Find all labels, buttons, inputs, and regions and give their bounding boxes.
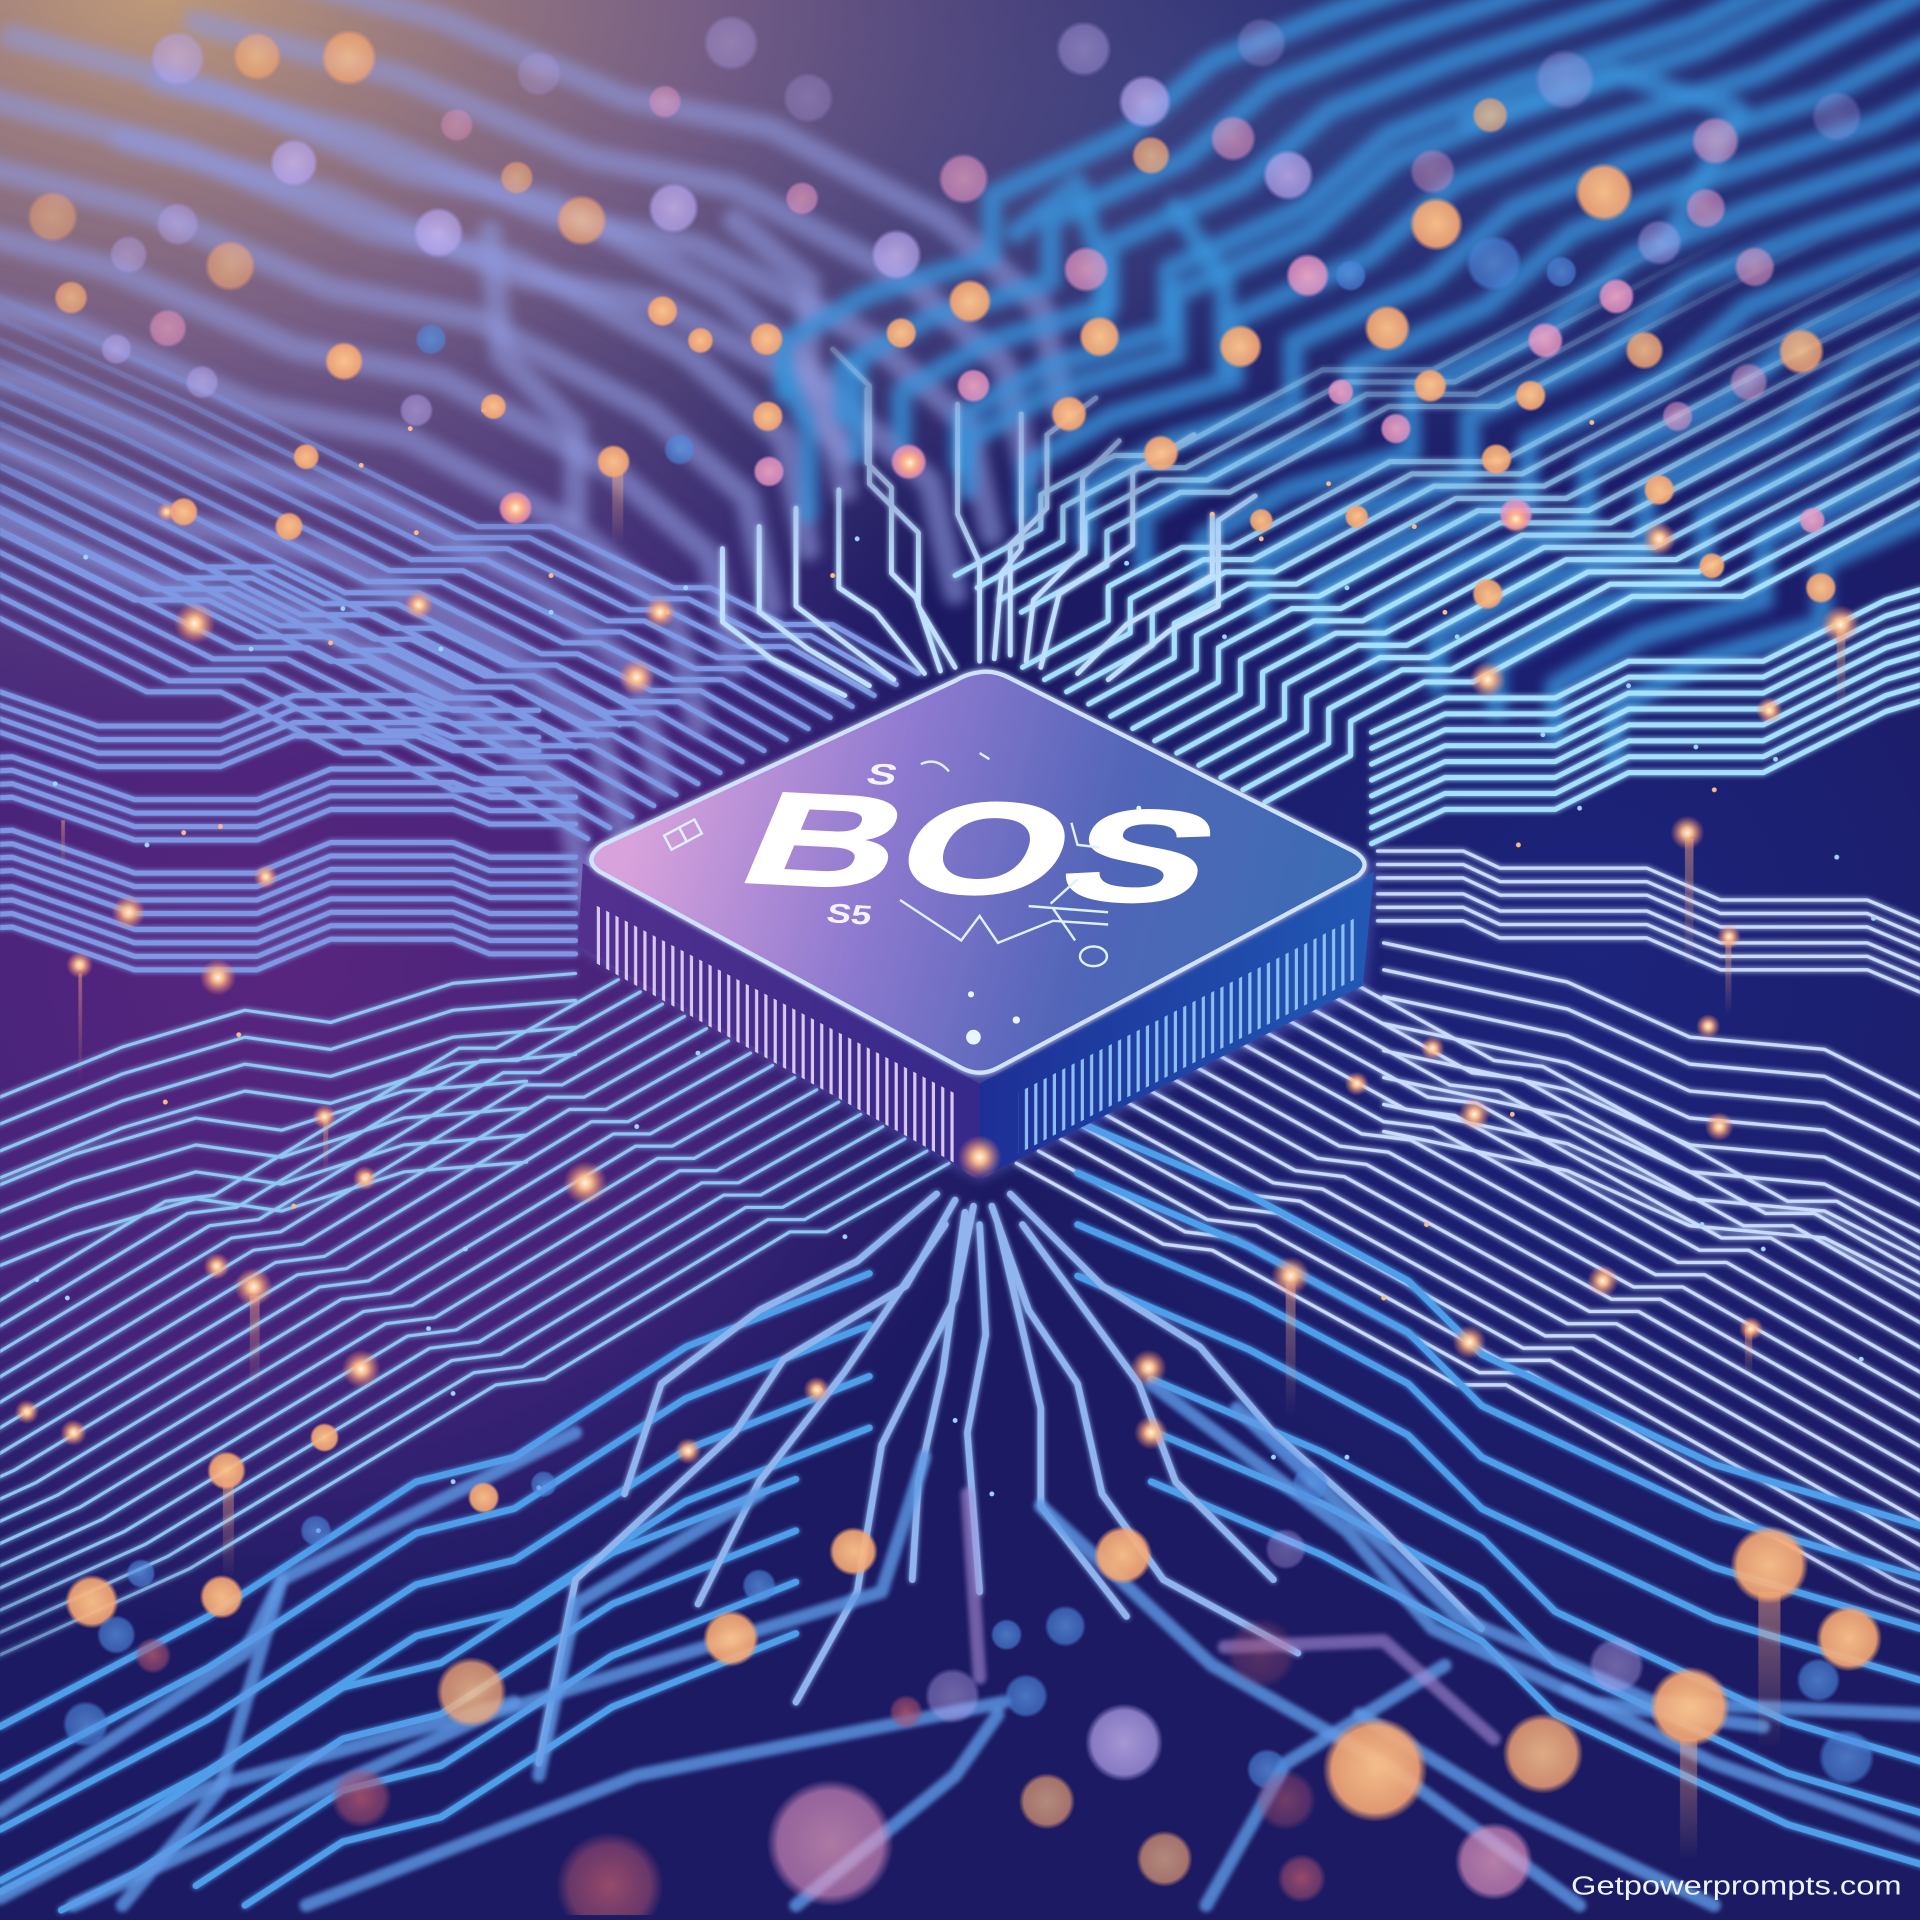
chip corner light xyxy=(958,1135,1002,1179)
chip small marks xyxy=(824,758,902,931)
chip top face xyxy=(591,672,1364,1073)
chip glow xyxy=(578,667,1378,1182)
hot sparks xyxy=(15,446,1860,1464)
traces: lower left bundle xyxy=(0,973,949,1691)
traces: right and lower right bundle xyxy=(1016,851,1920,1703)
chip left side with pins xyxy=(578,863,980,1178)
chip right side with pins xyxy=(980,872,1374,1178)
traces: upper left bundle xyxy=(0,282,918,970)
small particles xyxy=(37,410,1873,1531)
chip small marks: S5 xyxy=(824,898,875,931)
circuit traces radiating from the chip xyxy=(0,248,1920,1660)
far blurred traces at the top xyxy=(0,0,1920,901)
mid foreground traces, wider spaced xyxy=(0,1122,1920,1910)
chip small marks: S xyxy=(862,758,902,792)
light streaks under glowing points xyxy=(61,471,1845,1861)
chip label BOS: BOS xyxy=(721,764,1243,932)
chip highlight dots xyxy=(966,806,1141,1044)
traces: top fan xyxy=(722,349,1255,696)
watermark: Getpowerprompts.com xyxy=(1571,1872,1902,1900)
bokeh lights: blue xyxy=(62,235,1875,1790)
chip doodle lines xyxy=(664,753,1108,966)
bokeh lights: deep red xyxy=(135,1618,1326,1915)
near foreground blurred traces xyxy=(0,1384,1920,1905)
chip xyxy=(578,667,1378,1182)
traces: upper right bundle xyxy=(950,248,1920,850)
